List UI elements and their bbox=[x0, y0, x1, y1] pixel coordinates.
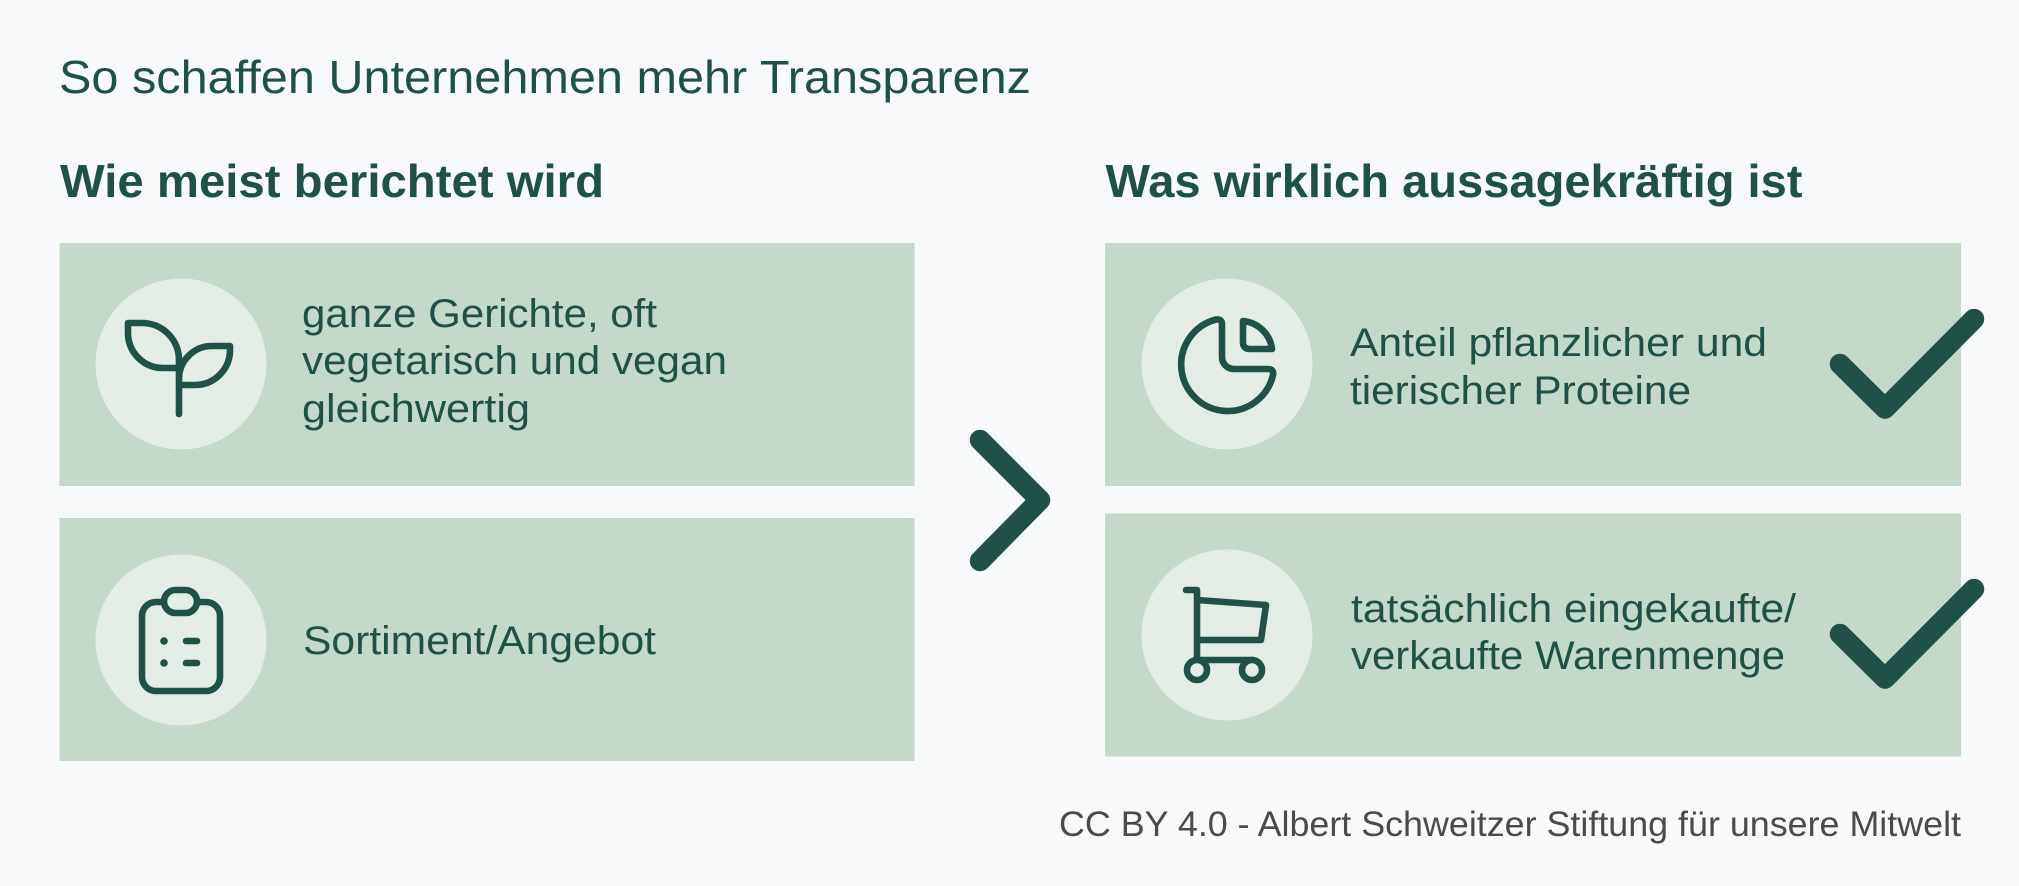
panel: purchased quantity bbox=[1105, 514, 1974, 756]
arrow: chevron bbox=[980, 440, 1040, 561]
heading: left column: Wie meist berichtet wird bbox=[60, 155, 604, 207]
panel: assortment bbox=[60, 518, 914, 761]
panel: protein share bbox=[1105, 243, 1974, 486]
panel: whole dishes bbox=[60, 243, 914, 486]
text: protein share bbox=[1350, 321, 1767, 413]
icon: shopping cart bbox=[1142, 550, 1312, 720]
icon: pie chart bbox=[1142, 278, 1312, 450]
text: whole dishes: vegetarisch und vegan bbox=[302, 339, 727, 383]
text: whole dishes: ganze Gerichte, oft bbox=[302, 292, 657, 336]
text: whole dishes bbox=[302, 292, 727, 431]
heading: right column: Was wirklich aussagekräftig ist bbox=[1106, 155, 1802, 207]
icon: clipboard bbox=[96, 554, 266, 726]
text: assortment: Sortiment/Angebot bbox=[303, 619, 656, 663]
credit line: CC BY 4.0 - Albert Schweitzer Stiftung für unsere Mitwelt bbox=[1059, 805, 1961, 844]
text: protein share: Anteil pflanzlicher und bbox=[1350, 321, 1767, 365]
icon: check mark bbox=[1840, 319, 1974, 408]
text: protein share: tierischer Proteine bbox=[1350, 369, 1691, 413]
text: purchased quantity: verkaufte Warenmenge bbox=[1351, 634, 1785, 678]
icon: check mark bbox=[1840, 589, 1974, 678]
title: So schaffen Unternehmen mehr Transparenz bbox=[59, 51, 1031, 103]
text: purchased quantity bbox=[1351, 587, 1797, 678]
text: whole dishes: gleichwertig bbox=[302, 387, 530, 431]
text: purchased quantity: tatsächlich eingekaufte/ bbox=[1351, 587, 1797, 631]
icon: sprout bbox=[96, 278, 266, 450]
